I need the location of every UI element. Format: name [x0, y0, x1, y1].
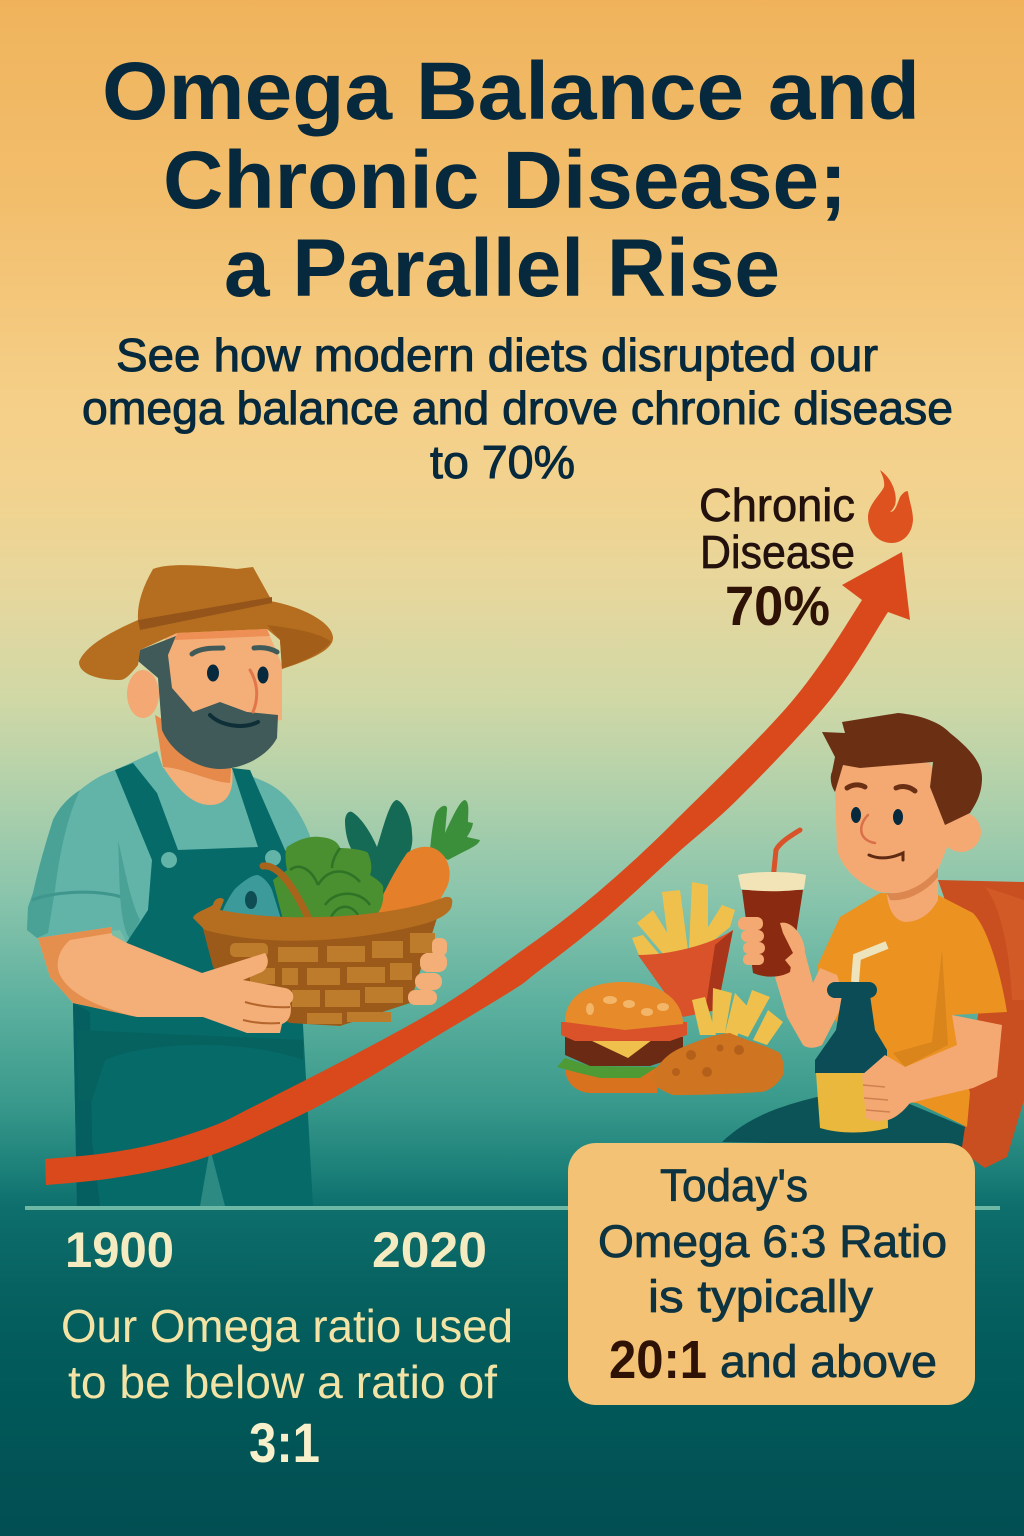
- farmer beard: [138, 636, 278, 769]
- rising arrow: [45, 552, 910, 1185]
- farmer neck: [155, 715, 233, 805]
- bottle with straw: [815, 945, 888, 1132]
- past ratio text: [61, 1300, 513, 1474]
- farmer right fingers: [408, 938, 447, 1005]
- chair: [938, 880, 1024, 1168]
- young man with fast food: [557, 713, 1024, 1168]
- chronic disease label: Chronic: [699, 479, 855, 531]
- callout: today's ratio: and above: [720, 1336, 937, 1387]
- face: [835, 760, 953, 893]
- cabbage: [273, 837, 383, 924]
- farmer ear: [127, 670, 159, 718]
- callout: today's ratio: Today's: [660, 1160, 808, 1211]
- fried chicken: [652, 1033, 784, 1095]
- basket handle: [263, 866, 311, 923]
- farmer arm and left hand: [38, 927, 293, 1033]
- icon: flame: [868, 470, 913, 543]
- chronic disease label: [699, 479, 855, 637]
- chronic disease label: Disease: [700, 526, 855, 578]
- timeline years: 1900: [65, 1222, 174, 1278]
- timeline years: [65, 1222, 487, 1278]
- title: Omega Balance and: [102, 46, 920, 137]
- subtitle: See how modern diets disrupted our: [116, 329, 878, 381]
- basket: [193, 897, 452, 1026]
- farmer overalls: [73, 763, 313, 1206]
- food in basket: [220, 800, 480, 924]
- farmer brows, nose and mouth: [192, 648, 277, 726]
- past ratio text: 3:1: [249, 1411, 320, 1474]
- farmer face: [165, 629, 282, 730]
- farmer eyes: [207, 664, 268, 684]
- subtitle: [82, 329, 953, 488]
- arm holding cup: [775, 945, 845, 1048]
- subtitle: omega balance and drove chronic disease: [82, 382, 953, 434]
- torso t-shirt: [817, 893, 1007, 1127]
- brows, nose and mouth: [847, 785, 915, 860]
- callout: today's ratio: Omega 6:3 Ratio: [598, 1216, 947, 1267]
- hand on bottle: [862, 1055, 910, 1121]
- fries box: [632, 882, 735, 1017]
- title: [102, 46, 920, 314]
- farmer hat: [79, 565, 333, 680]
- hand on cup: [738, 917, 805, 975]
- ear: [941, 812, 981, 852]
- pants: [722, 1097, 965, 1147]
- eyes: [851, 807, 903, 825]
- carrot top: [430, 800, 480, 860]
- farmer illustration: [27, 565, 480, 1206]
- farmer shirt: [27, 751, 310, 943]
- baseline axis: [25, 1206, 1000, 1210]
- subtitle: to 70%: [430, 436, 575, 488]
- right arm and hand: [862, 1015, 1002, 1121]
- past ratio text: Our Omega ratio used: [61, 1300, 513, 1352]
- burger: [557, 982, 687, 1093]
- callout: today's ratio: 20:1: [609, 1330, 707, 1390]
- title: a Parallel Rise: [224, 223, 780, 314]
- second fries: [692, 988, 783, 1045]
- neck: [887, 868, 938, 922]
- soda cup: [738, 830, 806, 977]
- callout: today's ratio: [568, 1143, 975, 1405]
- hair: [822, 713, 982, 825]
- past ratio text: to be below a ratio of: [68, 1356, 497, 1408]
- carrot: [372, 847, 450, 918]
- fish: [220, 875, 282, 922]
- title: Chronic Disease;: [163, 135, 847, 226]
- chronic disease label: 70%: [725, 574, 830, 637]
- callout: today's ratio: is typically: [648, 1271, 874, 1322]
- dark leaves: [345, 800, 412, 895]
- timeline years: 2020: [372, 1222, 487, 1278]
